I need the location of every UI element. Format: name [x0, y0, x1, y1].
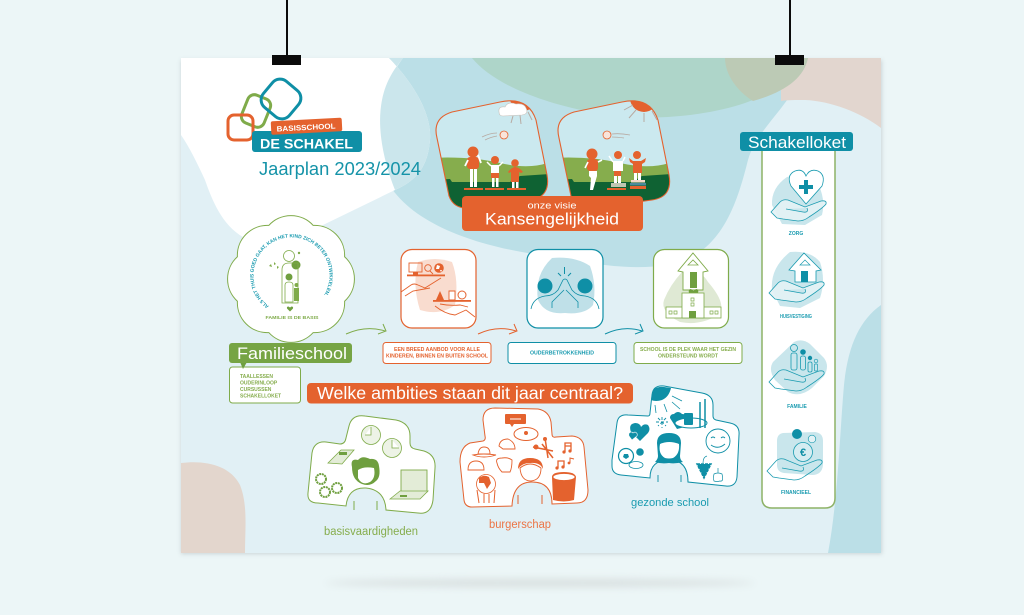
vision banner: Kansengelijkheid: [485, 210, 619, 228]
illustration: equal situation: [557, 100, 670, 202]
list: Familieschool: CURSUSSEN: [240, 387, 272, 393]
logo De Schakel: [228, 75, 362, 152]
label financieel: FINANCIEEL: [781, 490, 811, 496]
caption: school en gezin: [634, 342, 742, 364]
arrow orange: [478, 324, 517, 334]
logo De Schakel: BASISSCHOOL: [276, 121, 336, 134]
card: breed aanbod: [401, 250, 476, 328]
poster shadow: [181, 60, 882, 554]
heading Familieschool: [229, 343, 352, 369]
icon: financieel: [767, 429, 823, 480]
icon: huisvestiging: [769, 252, 824, 308]
list: Familieschool: TAALLESSEN: [240, 374, 273, 380]
list: Familieschool: SCHAKELLOKET: [240, 394, 281, 400]
caption: breed aanbod: [383, 342, 491, 364]
caption: breed aanbod: KINDEREN, BINNEN EN BUITEN SCHOOL: [386, 354, 488, 360]
card: school en gezin: [654, 250, 728, 328]
logo De Schakel: DE SCHAKEL: [260, 136, 353, 152]
caption: ouderbetrokkenheid: OUDERBETROKKENHEID: [530, 350, 594, 356]
label burgerschap: burgerschap: [489, 519, 551, 531]
family badge: FAMILIE IS DE BASIS: [266, 315, 318, 320]
caption: breed aanbod: EEN BREED AANBOD VOOR ALLE: [394, 347, 481, 353]
vision banner: [462, 196, 643, 231]
hanging clip right: [775, 0, 804, 65]
caption: school en gezin: SCHOOL IS DE PLEK WAAR HET GEZIN: [640, 347, 736, 353]
illustration: unequal situation: [435, 100, 548, 208]
title Jaarplan: Jaarplan 2023/2024: [259, 159, 421, 179]
icon: zorg: [771, 170, 826, 225]
card: ouderbetrokkenheid: [527, 250, 603, 328]
ambition: gezonde school: [612, 386, 739, 486]
ambition: basisvaardigheden: [308, 416, 435, 513]
label basisvaardigheden: basisvaardigheden: [324, 526, 418, 538]
heading ambitions: Welke ambities staan dit jaar centraal?: [317, 383, 623, 403]
icon: financieel: €: [800, 447, 806, 459]
heading Familieschool: Familieschool: [237, 344, 347, 363]
list: Familieschool: [230, 367, 300, 403]
arrow green: [346, 324, 386, 334]
family badge: ALS HET THUIS GOED GAAT, KAN HET KIND ZICH BETER ONTWIKKELEN.: [250, 234, 333, 308]
label familie: FAMILIE: [787, 404, 808, 410]
label zorg: ZORG: [789, 231, 803, 237]
caption: ouderbetrokkenheid: [508, 342, 616, 364]
caption: school en gezin: ONDERSTEUND WORDT: [658, 354, 718, 360]
vision banner: onze visie: [528, 200, 576, 212]
poster background: [181, 58, 881, 553]
heading Schakelloket: Schakelloket: [748, 133, 846, 152]
label huisvestiging: HUISVESTIGING: [780, 314, 812, 320]
hanging clip left: [272, 0, 301, 65]
icon: familie: [769, 340, 827, 394]
floor shadow: [325, 579, 755, 587]
arrow teal: [605, 324, 643, 334]
panel: Schakelloket: [762, 140, 835, 508]
list: Familieschool: OUDERINLOOP: [240, 380, 278, 386]
ambition: burgerschap: [460, 408, 588, 507]
label gezonde school: gezonde school: [631, 497, 709, 509]
family badge: [227, 215, 355, 343]
